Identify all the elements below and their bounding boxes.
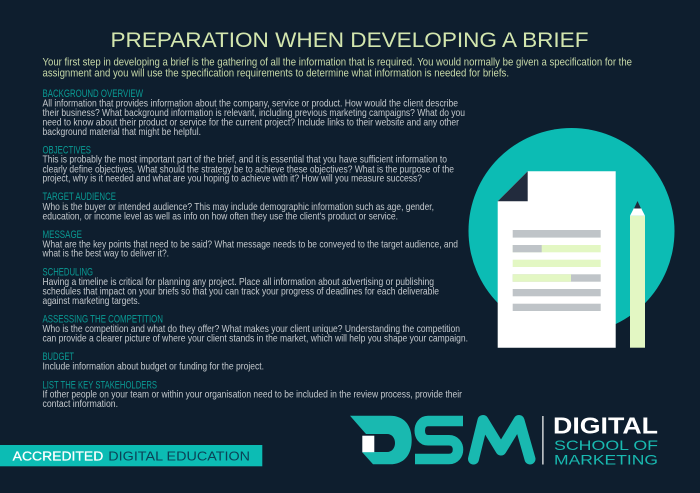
text: objectives [42, 155, 454, 185]
text: list the key stakeholders: If other people on your team or within your organisation need to be included in the review process, provide their [42, 390, 462, 401]
section: message [42, 229, 458, 260]
section: objectives [42, 144, 454, 185]
text: objectives: This is probably the most important part of the brief, and it is essential that you have sufficient information to [42, 155, 447, 166]
text: assessing the competition [42, 324, 468, 344]
section: scheduling [42, 266, 439, 307]
text: list the key stakeholders [42, 390, 462, 410]
section: background overview [42, 88, 465, 138]
heading: scheduling: SCHEDULING [42, 266, 93, 278]
section: assessing the competition [42, 314, 468, 344]
text: target audience: Who is the buyer or intended audience? This may include demographic information such as age, gender, [42, 202, 434, 213]
text: scheduling: schedules that impact on your briefs so that you can track your progress of deadlines for each deliverable [42, 287, 439, 298]
title: PREPARATION WHEN DEVELOPING A BRIEF [110, 29, 588, 52]
heading: background overview: BACKGROUND OVERVIEW [42, 88, 143, 100]
text: background overview [42, 99, 465, 138]
text: scheduling: Having a timeline is critical for planning any project. Place all information about advertising or publishing [42, 277, 434, 288]
text: assessing the competition: Who is the competition and what do they offer? What makes your client unique? Understanding the competition [42, 324, 460, 335]
heading: objectives: OBJECTIVES [42, 144, 91, 156]
logo text: school of: SCHOOL OF [554, 437, 658, 453]
text: list the key stakeholders: contact information. [42, 399, 118, 410]
text: background overview: need to know about their product or service for the current project? Include links to their website and any other [42, 117, 460, 128]
text: objectives: project, why is it needed and what are you hoping to achieve with it? How will you measure success? [42, 174, 422, 185]
text: target audience [42, 202, 434, 222]
logo mark: DSM [350, 416, 530, 464]
text: target audience: education, or income level as well as info on how often they use the client's product or service. [42, 211, 398, 222]
logo text: marketing: MARKETING [554, 451, 658, 467]
text: scheduling: against marketing targets. [42, 296, 140, 307]
section: list the key stakeholders [42, 379, 462, 410]
heading: target audience: TARGET AUDIENCE [42, 191, 116, 203]
text: assessing the competition: can provide a clearer picture of where your client stands in the market, which will help you shape your campaign. [42, 333, 468, 344]
heading: assessing the competition: ASSESSING THE COMPETITION [42, 314, 163, 326]
intro text [42, 57, 632, 80]
text: scheduling [42, 277, 439, 307]
intro text: assignment and you will use the specification requirements to determine what information is needed for briefs. [42, 68, 509, 80]
text: budget: Include information about budget or funding for the project. [42, 361, 264, 372]
banner: accredited digital education [0, 445, 262, 466]
icon: document [498, 171, 616, 348]
section: target audience [42, 191, 434, 222]
section: budget [42, 351, 264, 372]
logo text: digital: DIGITAL [553, 412, 658, 438]
icon: pencil [630, 201, 645, 348]
teal circle [468, 128, 674, 334]
illustration: document and pencil on teal circle [468, 128, 674, 348]
text: message: what is the best way to deliver it?. [42, 249, 169, 260]
text: message: What are the key points that need to be said? What message needs to be conveyed to the target audience, and [42, 239, 458, 250]
banner text: accredited: ACCREDITED [13, 448, 103, 463]
text: background overview: background material that might be helpful. [42, 127, 201, 138]
heading: budget: BUDGET [42, 351, 74, 363]
banner text: digital education: DIGITAL EDUCATION [108, 448, 250, 463]
text: objectives: clearly define objectives. What should the strategy be to achieve these objectives? What is the purpose of the [42, 164, 454, 175]
logo: digital school of marketing [350, 412, 658, 467]
text: background overview: their business? What background information is relevant, including previous marketing campaigns? What do you [42, 108, 465, 119]
heading: message: MESSAGE [42, 229, 82, 241]
text: background overview: All information that provides information about the company, service or product. How would the client describe [42, 99, 458, 110]
text: message [42, 239, 458, 260]
heading: list the key stakeholders: LIST THE KEY STAKEHOLDERS [42, 379, 157, 391]
